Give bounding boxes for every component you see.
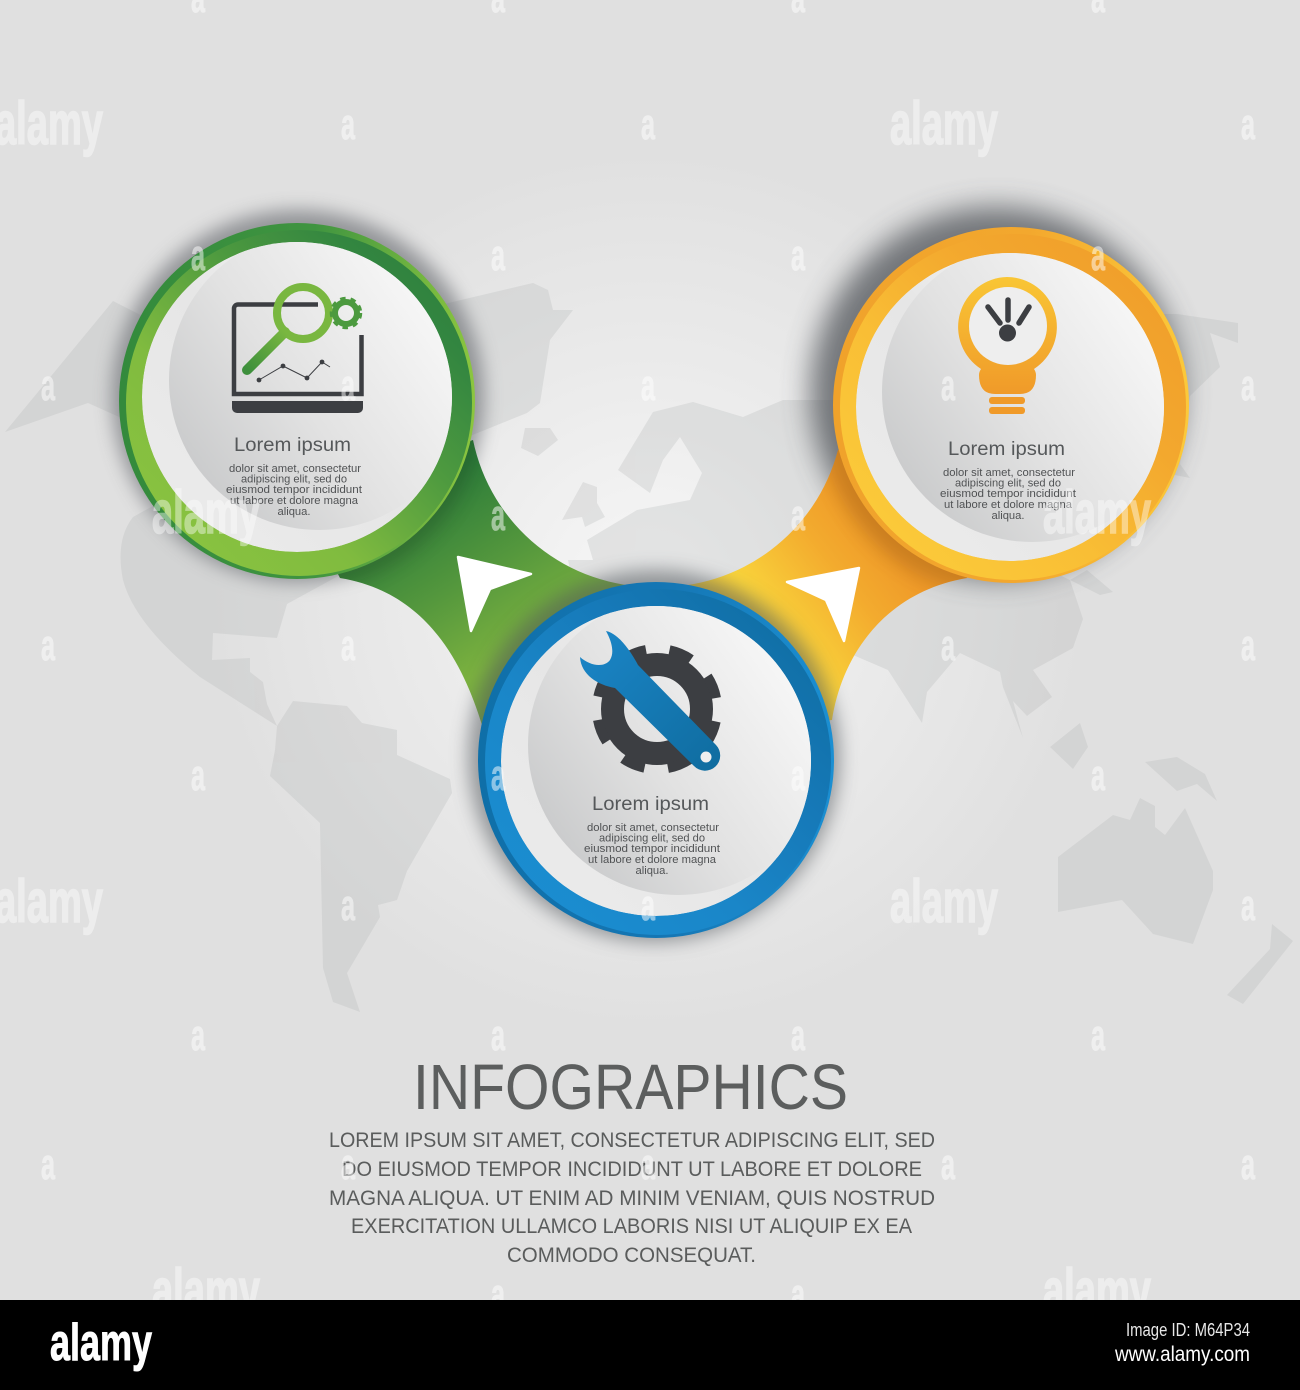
heading: green: Lorem ipsum	[234, 434, 351, 456]
icon: gear and wrench	[580, 631, 728, 780]
watermark: small: a	[791, 231, 805, 280]
footer url: www.alamy.com	[1114, 1343, 1250, 1366]
watermark: small: a	[1241, 621, 1255, 670]
watermark: small: a	[941, 361, 955, 410]
panel: orange circle	[833, 227, 1189, 583]
text block: green	[226, 463, 362, 518]
footer image id: Image ID: M64P34	[1126, 1320, 1250, 1340]
watermark: large: alamy	[890, 868, 998, 935]
watermark: small: a	[791, 1270, 805, 1319]
text block: green: aliqua.	[278, 506, 310, 518]
watermark: small: a	[41, 621, 55, 670]
watermark: large: alamy	[152, 1257, 260, 1324]
watermark: small: a	[941, 1140, 955, 1189]
text block: green: eiusmod tempor incididunt	[226, 484, 362, 496]
watermark: large	[0, 90, 1151, 1324]
watermark: small: a	[1091, 1011, 1105, 1060]
watermark: small: a	[191, 751, 205, 800]
shadow: orange circle	[810, 207, 1182, 579]
watermark: small: a	[491, 1270, 505, 1319]
watermark: small: a	[341, 100, 355, 149]
watermark: small: a	[491, 751, 505, 800]
watermark: small: a	[341, 361, 355, 410]
footer bar	[0, 1300, 1300, 1390]
watermark: small: a	[641, 100, 655, 149]
text block: orange: adipiscing elit, sed do	[955, 478, 1061, 490]
watermark: large: alamy	[1043, 1257, 1151, 1324]
watermark: small: a	[191, 1011, 205, 1060]
shadow: blue circle	[468, 570, 840, 942]
panel: green circle	[119, 223, 475, 579]
text block: blue: eiusmod tempor incididunt	[584, 843, 720, 855]
watermark: large: alamy	[0, 90, 103, 157]
watermark: small: a	[641, 361, 655, 410]
watermark: small: a	[491, 231, 505, 280]
icon: light bulb	[958, 277, 1057, 414]
watermark: small: a	[1091, 751, 1105, 800]
watermark: large: alamy	[890, 90, 998, 157]
text block: blue: aliqua.	[636, 865, 668, 877]
heading: orange: Lorem ipsum	[948, 438, 1065, 460]
text block: blue: adipiscing elit, sed do	[599, 832, 705, 844]
text block: blue: dolor sit amet, consectetur	[587, 822, 719, 834]
central light glow	[150, 150, 1150, 1030]
connector shading	[111, 219, 1191, 596]
world map	[5, 283, 1293, 1012]
watermark: small: a	[341, 881, 355, 930]
watermark: small: a	[341, 621, 355, 670]
text block: blue: ut labore et dolore magna	[588, 854, 716, 866]
watermark: large: alamy	[0, 868, 103, 935]
watermark: small: a	[941, 621, 955, 670]
watermark: small: a	[641, 1140, 655, 1189]
green ring	[126, 230, 472, 576]
watermark: small: a	[1241, 100, 1255, 149]
blue rim	[478, 582, 834, 938]
text block: green: adipiscing elit, sed do	[241, 474, 347, 486]
watermark: large: alamy	[1043, 479, 1151, 546]
arrow: green connector	[458, 557, 531, 631]
text block: description: MAGNA ALIQUA. UT ENIM AD MINIM VENIAM, QUIS NOSTRUD	[329, 1187, 935, 1210]
blue ring	[485, 589, 831, 935]
green disc	[142, 230, 469, 552]
title: INFOGRAPHICS	[413, 1051, 848, 1123]
orange rim	[833, 227, 1189, 583]
watermark: small: a	[791, 491, 805, 540]
text block: blue	[584, 822, 720, 877]
watermark: small: a	[1241, 881, 1255, 930]
text block: description: EXERCITATION ULLAMCO LABORIS NISI UT ALIQUIP EX EA	[351, 1215, 912, 1238]
orange ring	[840, 234, 1186, 580]
connector: orange	[655, 450, 1010, 730]
watermark: small: a	[791, 751, 805, 800]
shadow: green circle	[112, 210, 484, 582]
text block: orange: ut labore et dolore magna	[944, 499, 1072, 511]
watermark: small: a	[641, 881, 655, 930]
watermark: small: a	[1241, 361, 1255, 410]
watermark: large: alamy	[152, 479, 260, 546]
text block: orange: dolor sit amet, consectetur	[943, 467, 1075, 479]
footer logo: alamy	[50, 1314, 152, 1372]
arrow: orange connector	[787, 568, 859, 641]
text block: description: DO EIUSMOD TEMPOR INCIDIDUNT UT LABORE ET DOLORE	[342, 1158, 922, 1181]
watermark: small: a	[191, 231, 205, 280]
watermark: small: a	[41, 1140, 55, 1189]
connector: green	[300, 440, 655, 730]
text block: description: LOREM IPSUM SIT AMET, CONSECTETUR ADIPISCING ELIT, SED	[329, 1129, 935, 1152]
watermark: small: a	[491, 1011, 505, 1060]
watermark: small: a	[1241, 1140, 1255, 1189]
text block: orange	[940, 467, 1076, 522]
icon: laptop with magnifier and gear	[232, 287, 363, 413]
text block: description: COMMODO CONSEQUAT.	[507, 1244, 756, 1267]
text block: green: dolor sit amet, consectetur	[229, 463, 361, 475]
watermark: small: a	[41, 361, 55, 410]
blue disc	[501, 595, 828, 916]
panel: blue circle	[478, 582, 834, 938]
watermark: small: a	[341, 1140, 355, 1189]
green rim	[119, 223, 475, 579]
text block: description	[329, 1129, 935, 1267]
text block: green: ut labore et dolore magna	[230, 495, 358, 507]
watermark: small: a	[791, 1011, 805, 1060]
watermark: small: a	[491, 491, 505, 540]
watermark: small: a	[1091, 231, 1105, 280]
heading: blue: Lorem ipsum	[592, 793, 709, 815]
text block: orange: eiusmod tempor incididunt	[940, 488, 1076, 500]
text block: orange: aliqua.	[992, 510, 1024, 522]
orange disc	[856, 242, 1182, 561]
